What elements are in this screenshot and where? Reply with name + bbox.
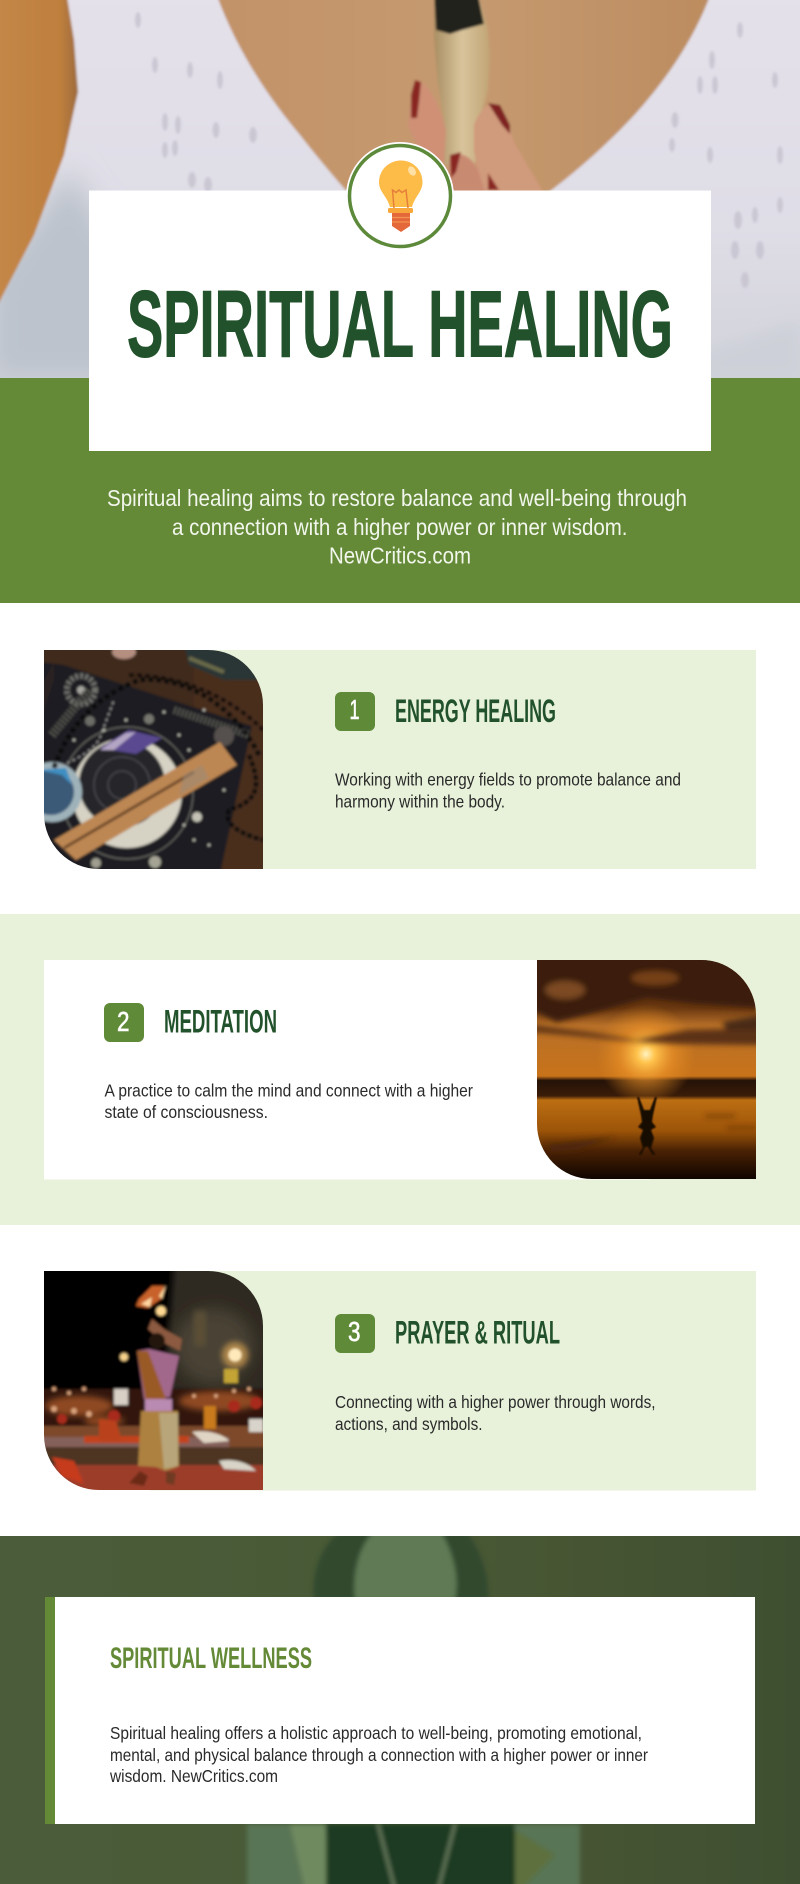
green intro band (0, 378, 800, 603)
intro text (107, 485, 687, 568)
intro text: NewCritics.com (329, 542, 471, 568)
number badge 1 (335, 692, 375, 731)
heading: ENERGY HEALING (395, 693, 556, 729)
number badge 2 (104, 1003, 144, 1042)
intro text: Spiritual healing aims to restore balance and well-being through (107, 485, 687, 511)
panel: spiritual wellness (45, 1597, 755, 1824)
number badge 3: 3 (348, 1316, 360, 1347)
description: mental, and physical balance through a connection with a higher power or inner (110, 1745, 648, 1765)
description: harmony within the body. (335, 792, 505, 812)
heading: SPIRITUAL WELLNESS (110, 1642, 312, 1675)
footer photo: woman with green overlay (0, 1530, 800, 1884)
panel: meditation band (0, 914, 800, 1225)
photo: crystals and incense holder on star chart (44, 650, 263, 869)
heading: MEDITATION (164, 1004, 277, 1040)
photo: evening fire ritual crowd (39, 1266, 268, 1495)
description: Spiritual healing offers a holistic approach to well-being, promoting emotional, (110, 1723, 642, 1743)
intro text: a connection with a higher power or inner wisdom. (172, 514, 628, 540)
description: state of consciousness. (104, 1102, 268, 1122)
number badge 1: 1 (350, 694, 360, 725)
icon: light bulb badge (346, 142, 454, 250)
panel: prayer and ritual (39, 1266, 756, 1495)
heading: PRAYER & RITUAL (395, 1314, 560, 1350)
hero photo: hand holding palo santo stick (0, 0, 800, 390)
number badge 3 (335, 1314, 375, 1353)
title card (89, 190, 711, 451)
accent bar (45, 1597, 55, 1824)
description (109, 1723, 648, 1786)
number badge 2: 2 (117, 1006, 130, 1037)
description (335, 1392, 656, 1434)
description: Connecting with a higher power through words, (335, 1392, 656, 1412)
description (335, 770, 681, 812)
photo: sunset beach silhouette (532, 955, 761, 1179)
panel: energy healing (22, 645, 756, 874)
description: actions, and symbols. (335, 1414, 482, 1434)
description: A practice to calm the mind and connect with a higher (104, 1080, 473, 1100)
description (104, 1080, 473, 1122)
description: wisdom. NewCritics.com (109, 1766, 278, 1786)
description: Working with energy fields to promote balance and (335, 770, 681, 790)
